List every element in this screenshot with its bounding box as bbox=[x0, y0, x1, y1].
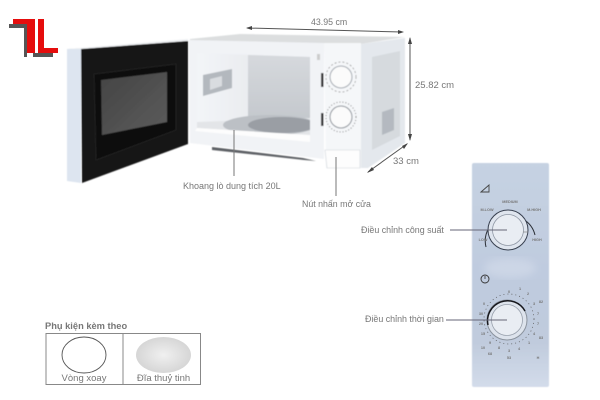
timer dial: 20 bbox=[479, 322, 483, 326]
dimension: depth: 33 cm bbox=[393, 156, 419, 167]
timer dial bbox=[479, 287, 543, 360]
callout: door button bbox=[302, 157, 371, 209]
power dial: LOW bbox=[479, 238, 488, 242]
accessory: glass plate: Đĩa thuỷ tinh bbox=[137, 373, 190, 384]
timer dial: H bbox=[537, 356, 540, 360]
dimension: width bbox=[246, 17, 404, 34]
accessories heading: Phụ kiện kèm theo bbox=[45, 321, 127, 331]
dimension: depth bbox=[367, 143, 419, 173]
accessory: glass plate bbox=[136, 337, 191, 384]
callout: power adjust: Điều chỉnh công suất bbox=[361, 225, 444, 235]
open door bbox=[67, 39, 188, 183]
power dial: MEDIUM bbox=[502, 200, 518, 204]
timer dial: 1 bbox=[519, 287, 521, 291]
timer dial: 68 bbox=[488, 352, 492, 356]
timer dial: 0 bbox=[508, 290, 510, 294]
power dial bbox=[479, 200, 542, 250]
microwave bbox=[67, 34, 405, 183]
power dial: M.HIGH bbox=[527, 208, 541, 212]
timer dial: 4 bbox=[518, 347, 521, 351]
timer dial: 53 bbox=[507, 356, 511, 360]
dimension: height: 25.82 cm bbox=[415, 80, 454, 91]
timer dial: 7 bbox=[537, 312, 539, 316]
oven body bbox=[189, 34, 405, 168]
power dial: M.LOW bbox=[480, 208, 494, 212]
timer dial: 0 bbox=[483, 302, 485, 306]
accessories table bbox=[46, 334, 200, 384]
dimension: width: 43.95 cm bbox=[311, 17, 347, 27]
timer dial: 10 bbox=[481, 346, 485, 350]
power dial: HIGH bbox=[532, 238, 542, 242]
callout: timer adjust: Điều chỉnh thời gian bbox=[365, 314, 444, 324]
callout: cavity: Khoang lò dung tích 20L bbox=[183, 181, 281, 191]
timer dial: 7 bbox=[537, 322, 539, 326]
timer dial: 2 bbox=[527, 292, 529, 296]
callout: door button: Nút nhấn mở cửa bbox=[302, 199, 371, 209]
control panel bbox=[472, 163, 549, 387]
dimension: height bbox=[408, 37, 454, 141]
timer dial: 8 bbox=[498, 346, 500, 350]
callout: cavity bbox=[183, 130, 281, 191]
timer dial: 83 bbox=[539, 336, 543, 340]
accessories bbox=[45, 321, 200, 384]
timer dial: 3 bbox=[508, 349, 510, 353]
timer dial: 82 bbox=[539, 300, 543, 304]
timer dial: 1 bbox=[528, 341, 530, 345]
accessory: ring bbox=[62, 337, 107, 384]
timer dial: 30 bbox=[479, 312, 483, 316]
timer dial: 15 bbox=[481, 332, 485, 336]
timer dial: 4 bbox=[533, 332, 536, 336]
power icon bbox=[481, 185, 489, 192]
logo bbox=[9, 19, 58, 57]
timer dial: 9 bbox=[489, 341, 491, 345]
timer icon bbox=[481, 275, 489, 283]
timer dial: 3 bbox=[533, 302, 535, 306]
accessory: ring: Vòng xoay bbox=[62, 373, 107, 384]
